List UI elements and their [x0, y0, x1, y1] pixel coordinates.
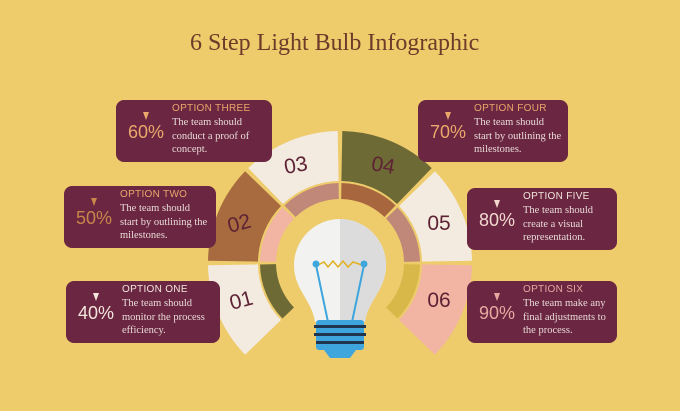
segment 05: 05: [427, 212, 451, 235]
segment 01: 01: [227, 287, 256, 315]
box: option three: The team should conduct a proof of concept.: [172, 117, 249, 155]
segment 03: 03: [282, 152, 309, 179]
box: option five: 80%: [479, 210, 515, 230]
box: option one: The team should monitor the process efficiency.: [122, 298, 205, 336]
segment 05: [392, 171, 472, 262]
box: option three: 60%: [128, 122, 164, 142]
box: option two: The team should start by outlining the milestones.: [120, 203, 207, 241]
box: option six: 90%: [479, 303, 515, 323]
box: option five: [467, 188, 617, 250]
segment 06: 06: [427, 289, 451, 312]
title: 6 Step Light Bulb Infographic: [190, 30, 479, 56]
icon: light bulb: [294, 219, 386, 358]
box: option one: OPTION ONE: [122, 284, 188, 295]
box: option two: 50%: [76, 208, 112, 228]
box: option four: [418, 100, 568, 162]
segment 03: [248, 131, 339, 211]
box: option four: 70%: [430, 122, 466, 142]
box: option three: [116, 100, 272, 162]
segment 01: [208, 264, 288, 355]
box: option four: The team should start by outlining the milestones.: [474, 117, 561, 155]
segment 04: 04: [370, 152, 397, 179]
box: option five: OPTION FIVE: [523, 191, 590, 202]
segment 04: [341, 131, 432, 211]
box: option six: The team make any final adjustments to the process.: [523, 298, 606, 336]
box: option six: OPTION SIX: [523, 284, 583, 295]
segment 06: [392, 264, 472, 355]
box: option one: [66, 281, 220, 343]
box: option five: The team should create a visual representation.: [523, 205, 593, 243]
segment 02: [208, 171, 288, 262]
box: option three: OPTION THREE: [172, 103, 250, 114]
box: option one: 40%: [78, 303, 114, 323]
box: option six: [467, 281, 617, 343]
segment 02: 02: [225, 210, 254, 238]
box: option four: OPTION FOUR: [474, 103, 547, 114]
box: option two: [64, 186, 216, 248]
box: option two: OPTION TWO: [120, 189, 187, 200]
